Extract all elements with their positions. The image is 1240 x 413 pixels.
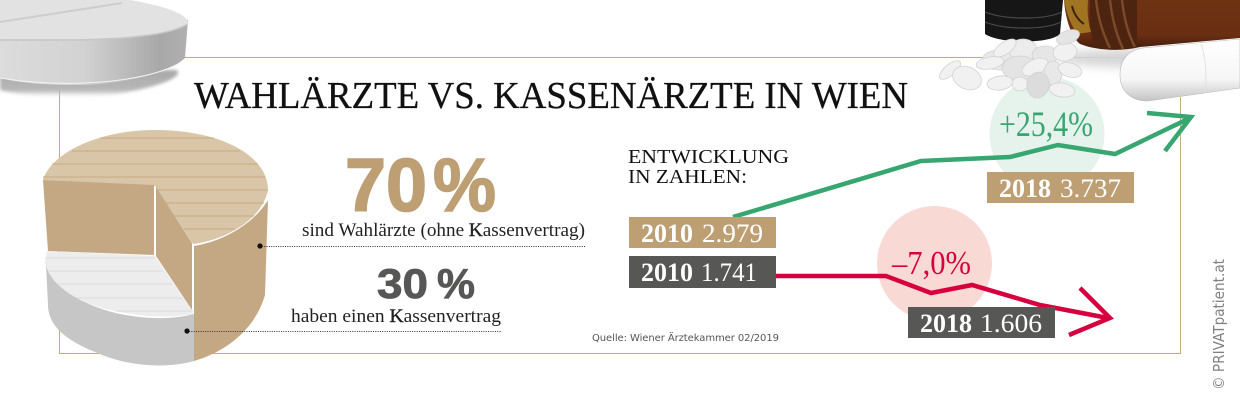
title: WAHLÄRZTE VS. KASSENÄRZTE IN WIEN [194, 75, 908, 117]
inner cut wall [156, 187, 192, 310]
icon: medicine bottle and cap [985, 0, 1240, 67]
white slice top [45, 251, 193, 317]
chart line: red falling arrow [776, 276, 1110, 335]
value box: 2010 2.979: 2.979 [702, 219, 763, 248]
grey slice wall [46, 265, 194, 365]
change: minus 7,0 percent: –7,0% [891, 245, 971, 282]
label: Wahlärzte: sind Wahlärzte (ohne Kassenvertrag) [302, 220, 585, 241]
leader line 70 percent [257, 243, 586, 249]
icon: black cap [985, 0, 1063, 42]
pie chart 70 / 30 [43, 130, 268, 365]
copyright: © PRIVATpatient.at [1210, 259, 1228, 390]
change: plus 25,4 percent: +25,4% [999, 104, 1093, 144]
circle: red highlight [877, 206, 992, 321]
leader line 30 percent [184, 328, 502, 334]
circle: green highlight [990, 76, 1104, 192]
stat: 70 percent [345, 143, 496, 227]
chart line: green rising arrow [733, 113, 1191, 217]
value box: 2018 1.606: 2018 [920, 309, 972, 338]
value box: 2010 1.741: 1.741 [701, 258, 757, 287]
frame [60, 58, 1180, 354]
stat: 30 percent [377, 260, 475, 307]
top face of tan slice [43, 130, 268, 244]
stat: 30 percent: % [437, 260, 475, 307]
value box: 2018 3.737: 3.737 [1060, 174, 1121, 203]
left cut wall [43, 180, 154, 255]
icon: tablets pile [937, 27, 1083, 100]
stat: 30 percent: 30 [377, 260, 428, 307]
icon: large tablet top left [0, 0, 188, 97]
stat: 70 percent: 70 [345, 143, 427, 227]
value box: 2010 1.741 [629, 256, 776, 288]
value box: 2018 1.606: 1.606 [980, 309, 1042, 338]
value box: 2018 3.737 [987, 172, 1134, 203]
outer tan wall [194, 200, 268, 361]
value box: 2018 1.606 [908, 307, 1055, 338]
source note: Quelle: Wiener Ärztekammer 02/2019 [592, 331, 779, 344]
value box: 2010 2.979: 2010 [641, 219, 693, 248]
heading: Entwicklung in Zahlen: IN ZAHLEN: [628, 166, 747, 188]
stat: 70 percent: % [433, 143, 496, 227]
label: Kassenvertrag: haben einen Kassenvertrag [291, 306, 501, 327]
value box: 2018 3.737: 2018 [999, 174, 1051, 203]
value box: 2010 2.979 [629, 217, 776, 248]
icon: amber bottle [1064, 0, 1240, 50]
icon: white capsule [1120, 39, 1240, 101]
value box: 2010 1.741: 2010 [641, 258, 693, 287]
heading: Entwicklung in Zahlen: ENTWICKLUNG [628, 146, 789, 168]
